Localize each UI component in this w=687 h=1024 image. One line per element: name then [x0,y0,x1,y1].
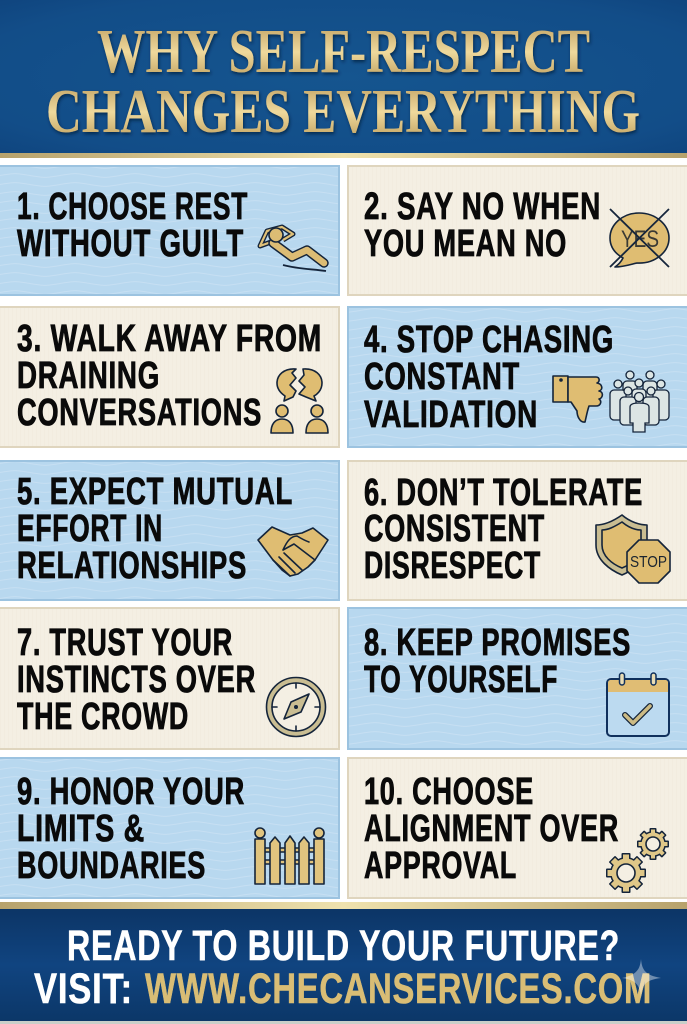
text: trust instincts: INSTINCTS OVER [17,659,256,701]
panel: 9 honor limits [0,757,340,899]
panel: 8 keep promises [347,607,687,750]
panel: 6 don't tolerate [347,460,687,601]
text: say no [364,186,601,265]
gold divider [0,902,687,909]
text: trust instincts: THE CROWD [17,696,189,738]
icon: reclining person [260,227,326,271]
text: choose alignment: 10. CHOOSE [364,771,534,813]
text: keep promises: TO YOURSELF [364,659,558,701]
panel: 7 trust instincts [0,607,340,750]
text: choose rest [17,186,248,265]
text: mutual effort: EFFORT IN [17,508,163,550]
header band [0,0,687,158]
icon: compass [266,678,326,736]
title [46,18,640,146]
text: mutual effort: RELATIONSHIPS [17,545,247,587]
text: stop chasing: CONSTANT [364,356,520,398]
sparkle mark [622,959,661,998]
text: keep promises [364,622,631,701]
panel: 2 say no [347,165,687,296]
text: walk away: DRAINING [17,355,160,397]
footer band [0,909,687,1021]
text: say no: YOU MEAN NO [364,223,567,265]
panel: 10 choose alignment [347,757,687,899]
text: don't tolerate [364,472,643,587]
text: choose alignment: APPROVAL [364,845,517,887]
text: choose rest: WITHOUT GUILT [17,223,244,265]
text: mutual effort: 5. EXPECT MUTUAL [17,471,293,513]
text: don't tolerate: CONSISTENT [364,508,545,550]
text: choose rest: 1. CHOOSE REST [17,186,248,228]
text: walk away [17,318,322,434]
text: honor limits: LIMITS & [17,808,145,850]
text: trust instincts [17,622,256,738]
text: stop chasing: VALIDATION [364,394,538,436]
footer text: VISIT: [34,965,133,1013]
text: trust instincts: 7. TRUST YOUR [17,622,233,664]
icon: broken bubbles and two people [271,369,328,433]
text: stop chasing [364,319,614,436]
icon: shield and stop sign [596,515,670,583]
panel: 3 walk away [0,306,340,448]
icon: crowd [610,371,669,432]
text: don't tolerate: DISRESPECT [364,545,541,587]
text: honor limits: BOUNDARIES [17,845,206,887]
text: say no: 2. SAY NO WHEN [364,186,601,228]
icon: thumbs down [553,376,602,422]
text: honor limits: 9. HONOR YOUR [17,771,245,813]
footer text [34,922,652,1013]
icon: gears [606,828,669,893]
text: walk away: CONVERSATIONS [17,392,262,434]
panel: 1 choose rest [0,165,340,296]
panel: 4 stop chasing [347,306,687,448]
text: walk away: 3. WALK AWAY FROM [17,318,322,360]
icon: calendar check [607,673,669,736]
icon: handshake [258,527,328,576]
icon: fence [255,828,324,884]
panel: 5 mutual effort [0,460,340,601]
text: choose alignment [364,771,619,887]
text: mutual effort [17,471,293,587]
icon: crossed out yes bubble [610,209,669,267]
text: honor limits [17,771,245,887]
icon: crossed out yes bubble: YES [621,226,659,253]
icon: shield and stop sign: STOP [630,554,667,571]
